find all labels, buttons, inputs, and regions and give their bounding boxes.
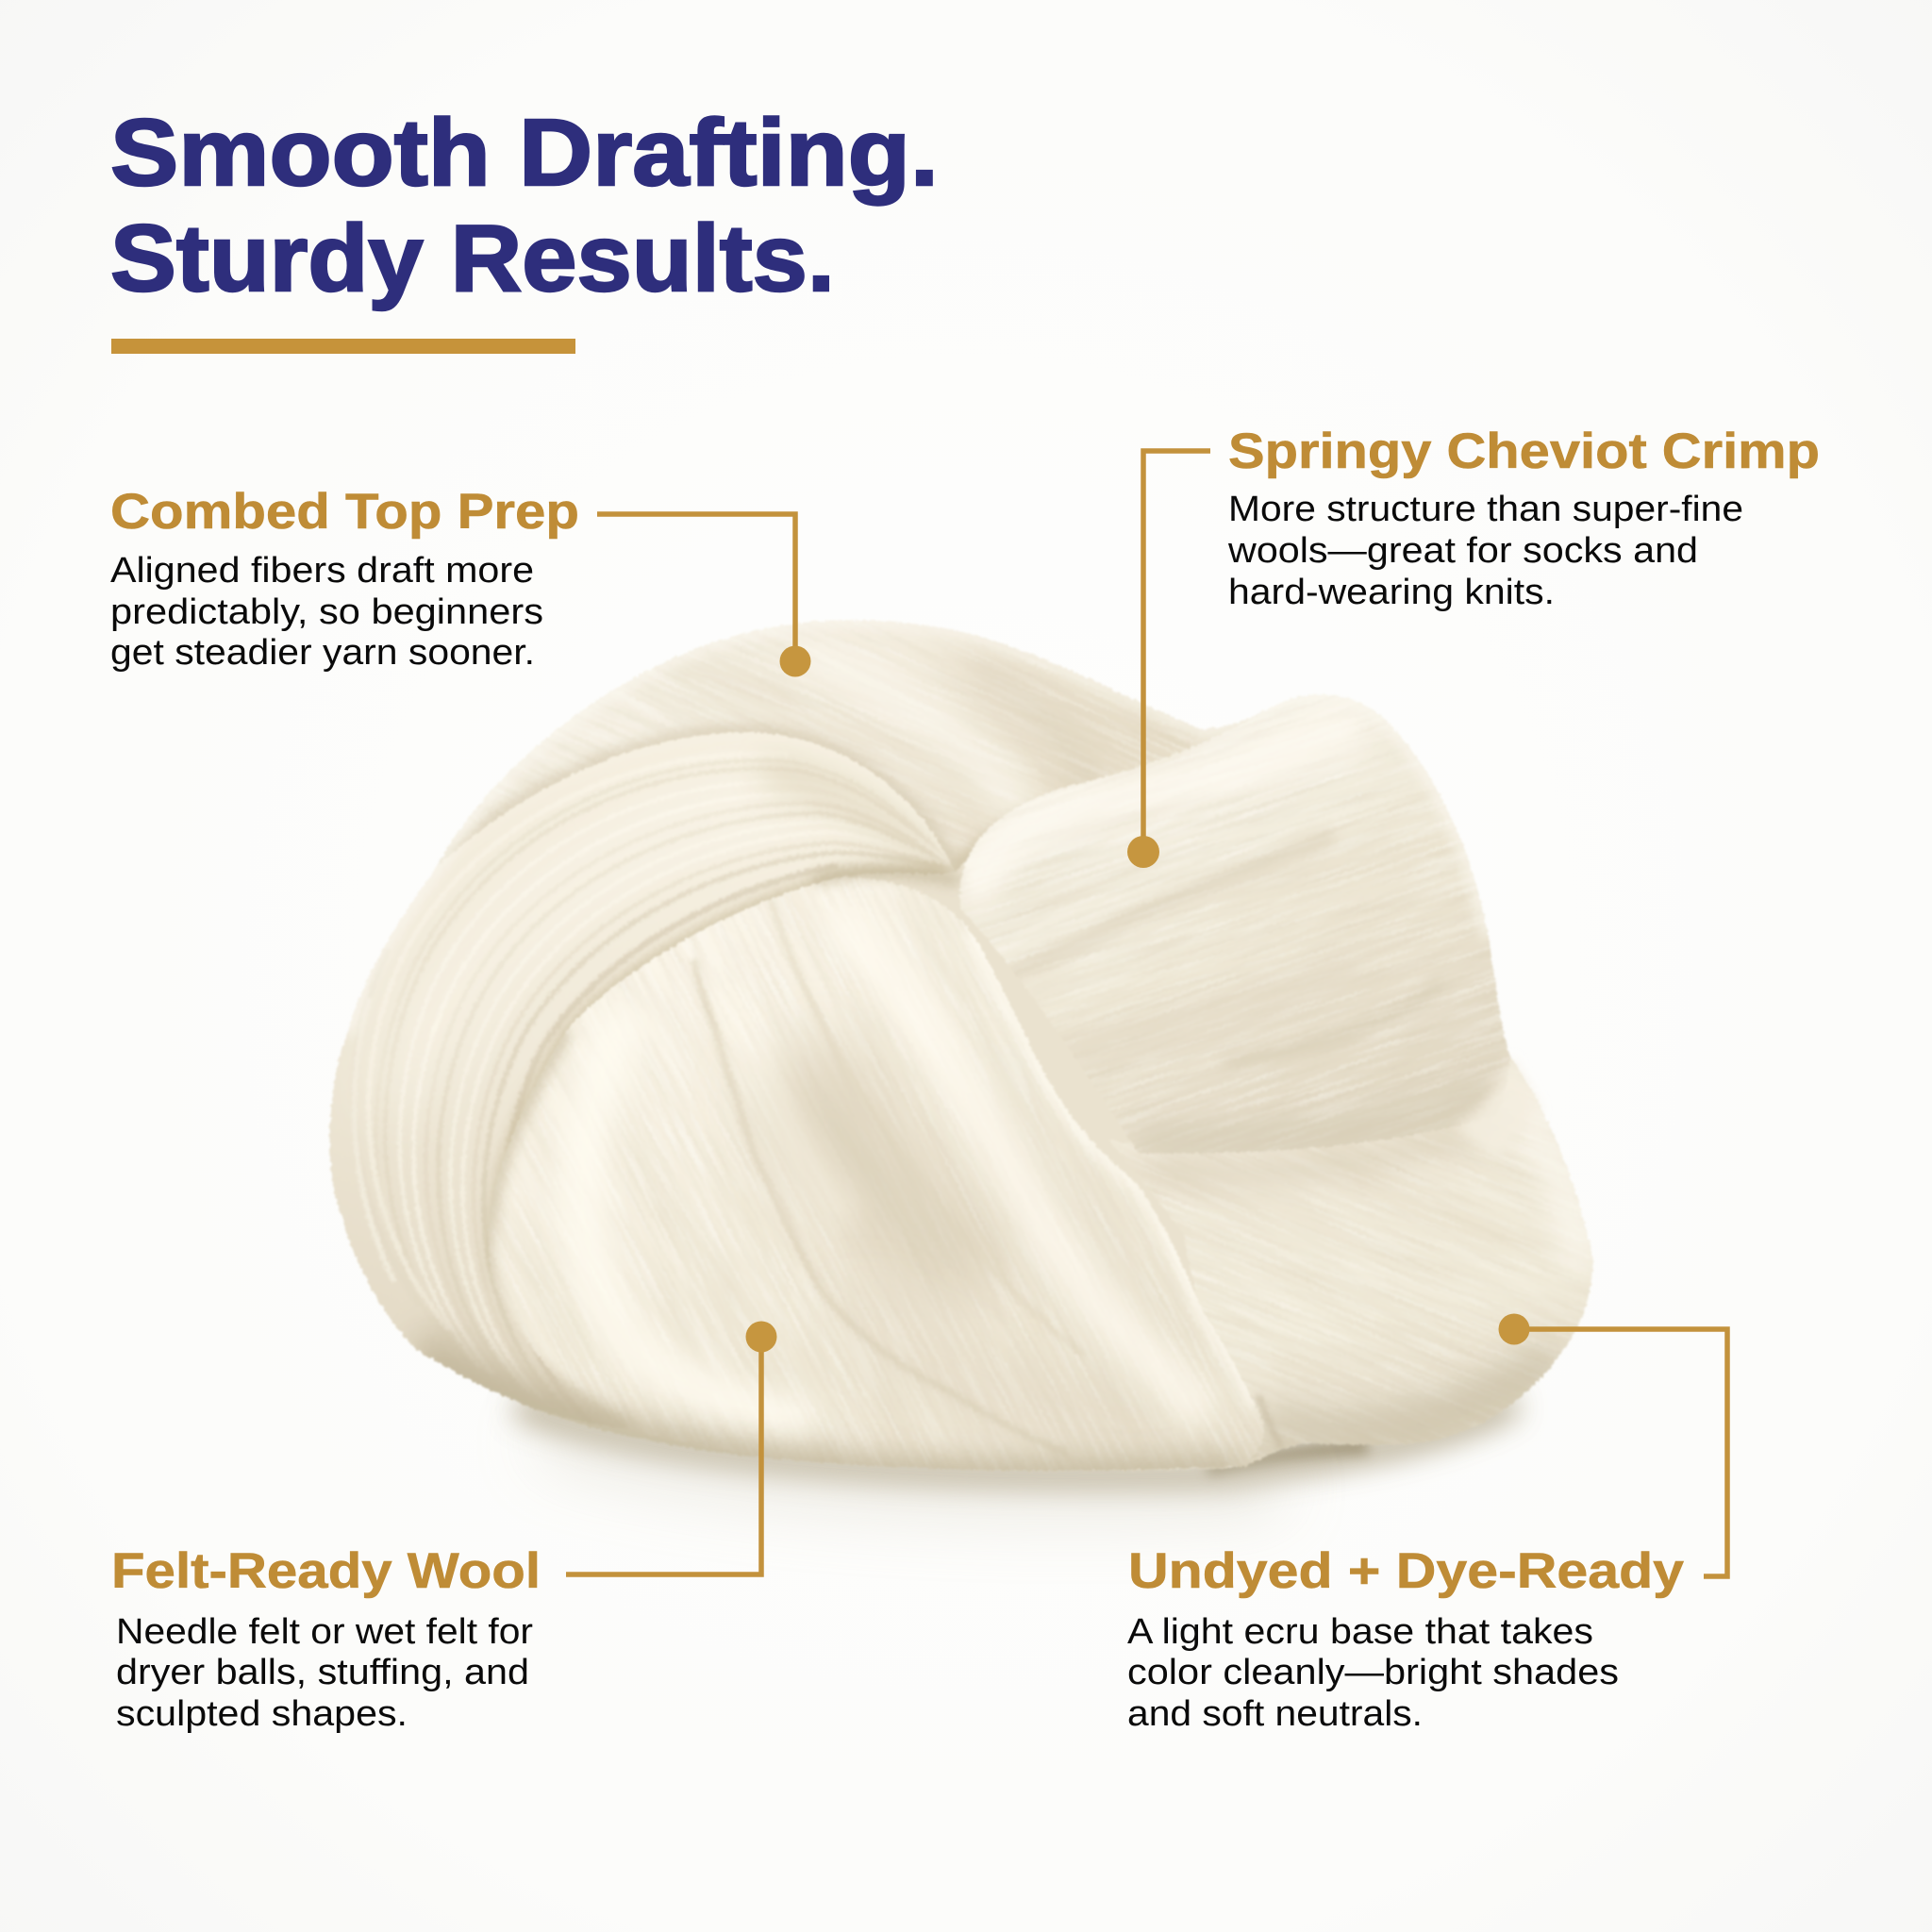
description: color cleanly—bright shades xyxy=(1127,1653,1619,1692)
rim light xyxy=(347,620,1489,1034)
description: predictably, so beginners xyxy=(110,592,543,632)
leader line xyxy=(566,1321,777,1574)
description: More structure than super-fine xyxy=(1228,490,1743,529)
description: Needle felt or wet felt for xyxy=(116,1612,533,1652)
title: Sturdy Results. xyxy=(110,206,835,311)
fibers: left wrap xyxy=(354,754,955,1424)
title: Smooth Drafting. xyxy=(110,100,939,206)
callout: Undyed + Dye-Ready xyxy=(1127,1313,1727,1734)
description xyxy=(110,551,543,673)
heading: Felt-Ready Wool xyxy=(111,1543,541,1599)
description: Aligned fibers draft more xyxy=(110,551,534,591)
callout: Felt-Ready Wool xyxy=(111,1321,777,1734)
description: wools—great for socks and xyxy=(1227,531,1698,571)
fold junction shadow xyxy=(813,872,958,881)
leader line xyxy=(597,514,811,677)
strand: left wrap xyxy=(330,733,955,1429)
lobe blend between strands xyxy=(1454,1058,1541,1158)
heading: Undyed + Dye-Ready xyxy=(1128,1543,1685,1599)
ground shadow xyxy=(518,1402,1516,1496)
bottom edge shading xyxy=(419,1356,1553,1477)
heading: Springy Cheviot Crimp xyxy=(1228,424,1820,479)
strand: lower right xyxy=(1120,1087,1593,1456)
heading: Combed Top Prep xyxy=(110,484,579,540)
shading: mid beige band xyxy=(752,1035,1023,1306)
creases xyxy=(693,959,1068,1454)
title xyxy=(110,100,939,311)
description: sculpted shapes. xyxy=(116,1694,408,1734)
wool ball photo xyxy=(328,619,1594,1532)
leader line xyxy=(1127,451,1210,868)
description xyxy=(116,1612,533,1734)
description xyxy=(1227,490,1743,612)
strand: upper right xyxy=(958,694,1508,1155)
description xyxy=(1127,1612,1619,1734)
strand: front folds xyxy=(489,877,1264,1470)
description: A light ecru base that takes xyxy=(1127,1612,1593,1652)
leader line xyxy=(1498,1313,1727,1576)
shading: highlights xyxy=(582,1010,813,1424)
title underline xyxy=(111,339,575,354)
callout: Springy Cheviot Crimp xyxy=(1127,424,1820,868)
strand: top xyxy=(480,623,1189,872)
description: get steadier yarn sooner. xyxy=(110,633,535,673)
description: dryer balls, stuffing, and xyxy=(116,1653,529,1692)
description: hard-wearing knits. xyxy=(1228,573,1555,612)
description: and soft neutrals. xyxy=(1127,1694,1423,1734)
silhouette base xyxy=(330,620,1593,1471)
callout: Combed Top Prep xyxy=(110,484,811,677)
